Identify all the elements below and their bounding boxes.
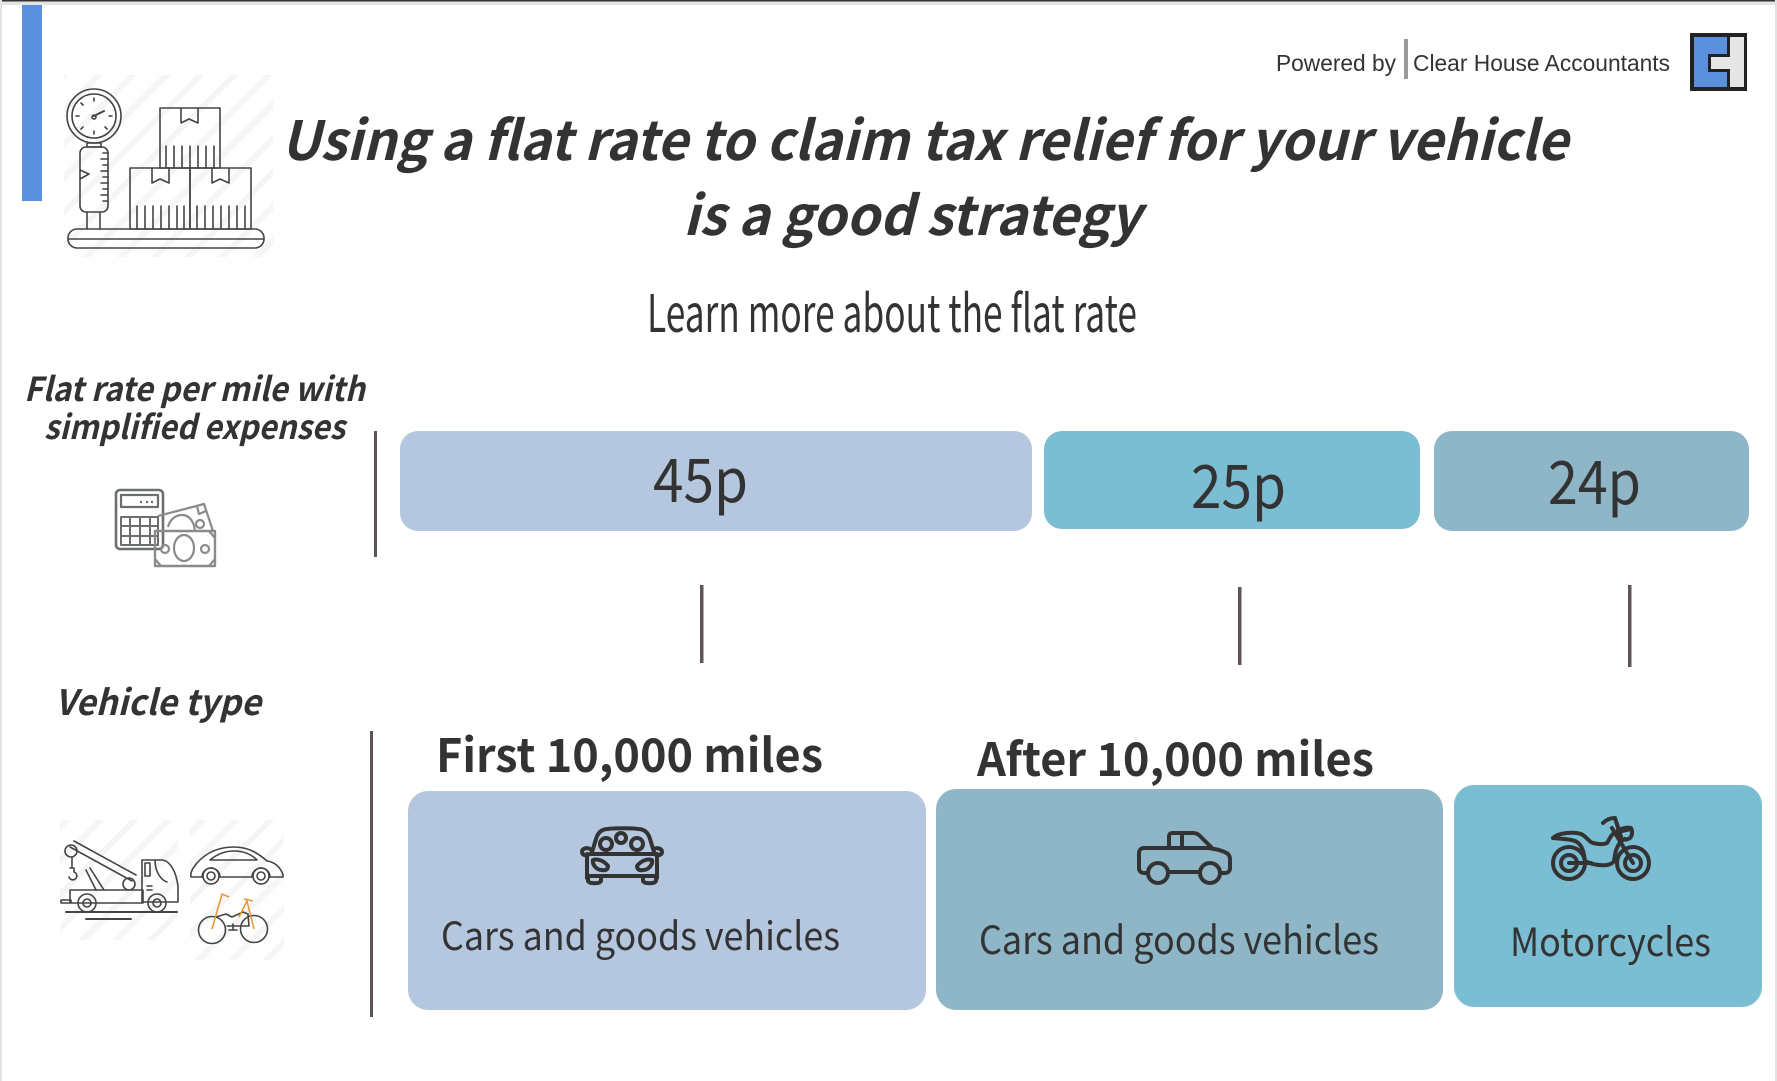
panel: 24p rate [1434, 431, 1749, 531]
accent bar [22, 5, 42, 201]
subtitle: Learn more about the flat rate [647, 272, 1137, 347]
panel: 24p rate: 24p [1548, 435, 1641, 522]
attribution: powered by: Clear House Accountants [1413, 50, 1670, 76]
icon: pickup truck [1139, 833, 1230, 883]
panel: 25p rate: 25p [1191, 439, 1286, 526]
panel: 45p rate [400, 431, 1032, 531]
attribution: powered by: Powered by [1276, 50, 1396, 76]
panel: cars and goods vehicles, first 10,000 miles: Cars and goods vehicles [441, 906, 840, 962]
icon: motorcycle [1553, 818, 1649, 879]
title: Using a flat rate to claim tax relief for your vehicle [281, 97, 1573, 176]
icon: car front [582, 828, 662, 883]
heading: flat rate per mile [24, 363, 367, 449]
panel: cars and goods vehicles, after 10,000 miles [936, 789, 1443, 1010]
title: is a good strategy [683, 172, 1148, 251]
panel: cars and goods vehicles, after 10,000 miles: Cars and goods vehicles [979, 910, 1379, 966]
heading: flat rate per mile: simplified expenses [44, 401, 348, 449]
divider [374, 431, 377, 557]
heading: flat rate per mile: Flat rate per mile with [24, 363, 367, 411]
heading: vehicle type: Vehicle type [55, 675, 264, 726]
panel: motorcycles: Motorcycles [1510, 912, 1711, 968]
icon: weighing scale with boxes [64, 75, 273, 257]
panel: motorcycles [1454, 785, 1762, 1007]
panel: 25p rate [1044, 431, 1420, 529]
attribution: powered by [1276, 39, 1670, 79]
title [281, 97, 1573, 251]
icon: tow truck, car and bicycle [60, 820, 284, 960]
panel: 45p rate: 45p [653, 433, 748, 520]
heading: after 10,000 miles: After 10,000 miles [976, 724, 1374, 790]
panel: cars and goods vehicles, first 10,000 miles [408, 791, 926, 1010]
heading: first 10,000 miles: First 10,000 miles [436, 720, 823, 786]
icon: calculator and banknotes [116, 490, 215, 566]
divider [370, 731, 373, 1017]
icon: logo [1690, 33, 1747, 91]
